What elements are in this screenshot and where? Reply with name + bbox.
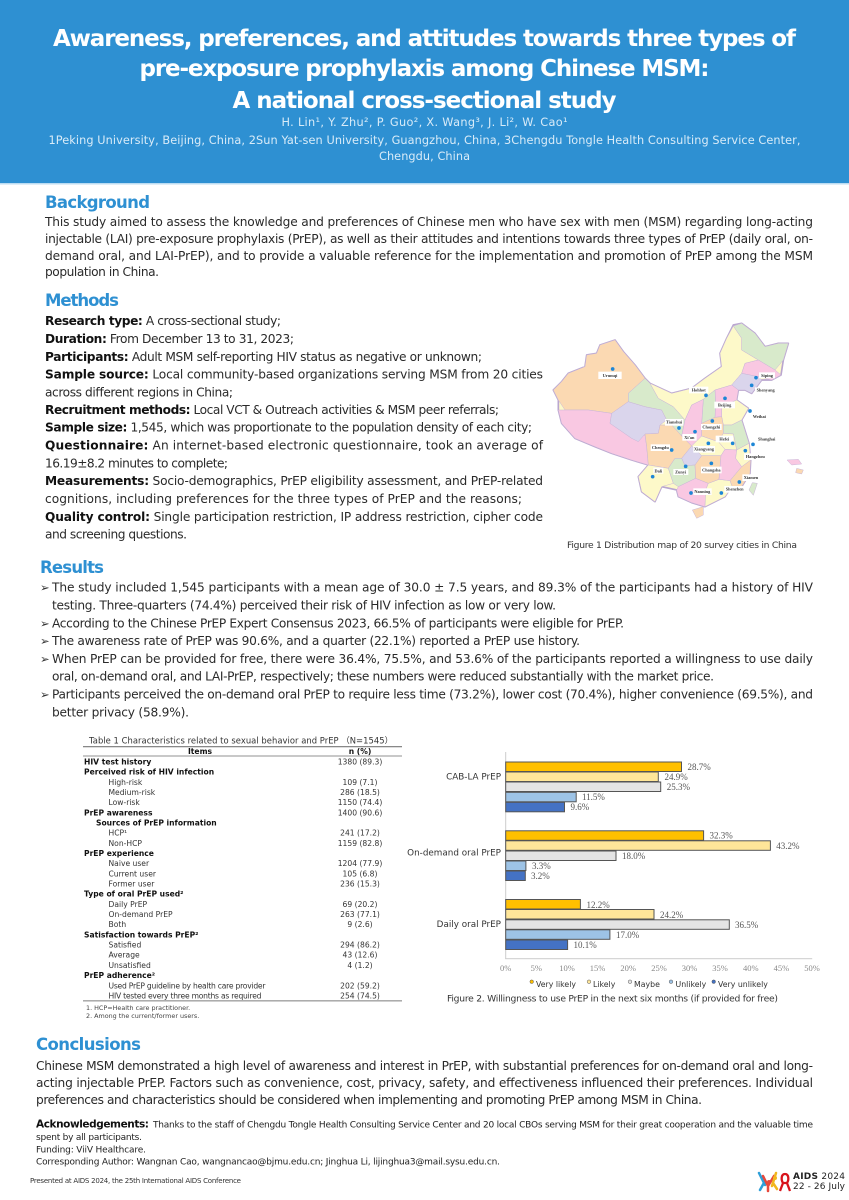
acknowledgements: Acknowledgements: xyxy=(36,1118,149,1130)
conclusions text: acting injectable PrEP. Factors such as convenience, cost, privacy, safety, and effectiveness influenced their preferences. Individual xyxy=(36,1076,813,1090)
city labels: Shenzhen xyxy=(726,487,744,492)
chart axes xyxy=(505,752,812,959)
table rows: HIV tested every three months as required xyxy=(108,991,262,1000)
table rows: 4 (1.2) xyxy=(347,961,373,970)
bars: daily oral PrEP xyxy=(506,900,729,950)
methods list: Sample source: Local community-based organizations serving MSM from 20 cities xyxy=(45,368,543,382)
table rows: Used PrEP guideline by health care provider xyxy=(108,981,266,990)
city labels: Changsha xyxy=(702,467,721,472)
results bullets: ➢ xyxy=(40,616,50,630)
acknowledgements: Thanks to the staff of Chengdu Tongle Health Consulting Service Center and 20 local CBOs serving MSM for their great cooperation and the valuable time xyxy=(152,1120,813,1130)
background text: This study aimed to assess the knowledge and preferences of Chinese men who have sex with men (MSM) regarding long-acting xyxy=(44,215,813,229)
table caption: Table 1 Characteristics related to sexual behavior and PrEP （N=1545） xyxy=(88,736,393,746)
table rows: 1380 (89.3) xyxy=(338,758,382,766)
category labels: CAB-LA PrEP xyxy=(446,773,501,783)
figure 2: bar chart xyxy=(407,752,820,1004)
table rows: Non-HCP xyxy=(108,839,142,848)
city labels: Xi'an xyxy=(684,435,695,440)
bars: CAB-LA PrEP xyxy=(506,762,682,812)
table rows: HCP¹ xyxy=(108,829,127,838)
table rows: Unsatisfied xyxy=(108,961,151,970)
values: daily oral PrEP: 24.2% xyxy=(660,910,684,920)
results bullets: ➢ xyxy=(40,634,50,648)
background text: injectable (LAI) pre-exposure prophylaxis (PrEP), as well as their attitudes and intentions towards three types of PrEP (daily oral, on- xyxy=(45,232,813,246)
legend xyxy=(530,980,768,989)
x axis ticks: 40% xyxy=(743,963,759,973)
authors and affiliations: 1Peking University, Beijing, China, 2Sun Yat-sen University, Guangzhou, China, 3Chengdu Tongle Health Consulting Service Center, xyxy=(48,134,800,147)
table rows: PrEP awareness xyxy=(84,808,153,817)
table header: Items xyxy=(188,747,212,756)
table rows: High-risk xyxy=(108,778,143,787)
category labels xyxy=(407,773,501,930)
acknowledgements: spent by all participants. xyxy=(36,1133,142,1143)
x axis ticks: 35% xyxy=(712,963,728,973)
values: daily oral PrEP: 36.5% xyxy=(735,920,759,930)
heading: methods: Methods xyxy=(45,291,119,310)
city labels: Zunyi xyxy=(675,470,687,475)
table rows: 109 (7.1) xyxy=(343,778,377,787)
table rows: Daily PrEP xyxy=(108,900,147,909)
legend: Unlikely xyxy=(676,980,707,989)
city labels: Hangzhou xyxy=(746,454,765,459)
table rows: PrEP adherence² xyxy=(84,971,155,980)
acknowledgements: Funding: ViiV Healthcare. xyxy=(36,1146,146,1156)
icon: red ribbon xyxy=(780,1174,790,1191)
heading: background: Background xyxy=(45,193,150,212)
results bullets: testing. Three-quarters (74.4%) perceived their risk of HIV infection as low or very low. xyxy=(52,598,556,612)
x axis ticks: 15% xyxy=(590,963,605,973)
table rows: 241 (17.2) xyxy=(340,829,380,838)
city labels: Nanning xyxy=(694,489,711,494)
table rows: 1159 (82.8) xyxy=(338,839,382,848)
category labels: Daily oral PrEP xyxy=(437,920,501,930)
table rows: Perceived risk of HIV infection xyxy=(84,768,214,777)
table rows: 202 (59.2) xyxy=(340,981,380,990)
acknowledgements: Corresponding Author: Wangnan Cao, wangnancao@bjmu.edu.cn; Jinghua Li, lijinghua3@mail.sysu.edu.cn. xyxy=(36,1158,500,1168)
table header xyxy=(83,746,402,756)
results bullets: When PrEP can be provided for free, there were 36.4%, 75.5%, and 53.6% of the participants reported a willingness to use daily xyxy=(52,652,813,666)
city labels: Weihai xyxy=(753,414,767,419)
background text: population in China. xyxy=(45,265,159,279)
section: background xyxy=(44,193,813,279)
china map xyxy=(553,323,803,518)
results bullets: According to the Chinese PrEP Expert Consensus 2023, 66.5% of participants were eligible for PrEP. xyxy=(52,616,624,630)
methods list xyxy=(45,314,544,542)
table rows: Naive user xyxy=(108,859,150,868)
section: conclusions xyxy=(36,1035,813,1107)
values: daily oral PrEP: 10.1% xyxy=(574,940,597,950)
values: on-demand oral PrEP xyxy=(531,830,800,881)
values: on-demand oral PrEP: 43.2% xyxy=(776,841,800,851)
legend: Very likely xyxy=(536,980,576,989)
table rows: Sources of PrEP information xyxy=(96,818,217,828)
footer note: Presented at AIDS 2024, the 25th International AIDS Conference xyxy=(30,1177,241,1185)
results bullets: The study included 1,545 participants with a mean age of 30.0 ± 7.5 years, and 89.3% of the participants had a history of HIV xyxy=(51,581,814,595)
table footnotes: 2. Among the current/former users. xyxy=(86,1012,199,1020)
authors and affiliations: Chengdu, China xyxy=(379,150,470,163)
table rows: 9 (2.6) xyxy=(347,920,373,929)
city labels: Shanghai xyxy=(758,437,776,442)
methods list: Quality control: Single participation restriction, IP address restriction, cipher code xyxy=(45,510,543,524)
icon: figures xyxy=(759,1173,777,1191)
table footnotes: 1. HCP=Health care practitioner. xyxy=(86,1004,190,1012)
city labels: Urumqi xyxy=(603,373,618,378)
conclusions text: preferences and characteristics should be considered when implementing and promoting PrEP among MSM in China. xyxy=(36,1093,702,1107)
city labels: Xiamen xyxy=(744,475,759,480)
values: daily oral PrEP: 12.2% xyxy=(586,900,610,910)
table rows: 69 (20.2) xyxy=(343,900,377,909)
x axis ticks: 5% xyxy=(531,963,542,973)
city markers xyxy=(611,367,758,495)
x axis ticks: 50% xyxy=(804,963,820,973)
values: CAB-LA PrEP: 25.3% xyxy=(667,782,691,792)
table rows: Type of oral PrEP used² xyxy=(84,890,184,899)
x axis ticks: 10% xyxy=(559,963,575,973)
results bullets: Participants perceived the on-demand oral PrEP to require less time (73.2%), lower cost (70.4%), higher convenience (69.5%), and xyxy=(52,688,813,702)
x axis ticks: 0% xyxy=(500,963,511,973)
table rows: 294 (86.2) xyxy=(340,941,380,950)
table 1: characteristics xyxy=(83,736,402,1020)
values: daily oral PrEP xyxy=(574,900,759,950)
authors and affiliations: H. Lin¹, Y. Zhu², P. Guo², X. Wang³, J. Li², W. Cao¹ xyxy=(282,116,568,129)
table rows xyxy=(84,758,382,1000)
table rows: 263 (77.1) xyxy=(340,910,380,919)
methods list: and screening questions. xyxy=(45,528,187,542)
legend: Very unlikely xyxy=(718,980,768,989)
figure 2 caption: Figure 2. Willingness to use PrEP in the next six months (if provided for free) xyxy=(447,994,778,1004)
methods list: Recruitment methods: Local VCT & Outreach activities & MSM peer referrals; xyxy=(45,403,499,417)
results bullets xyxy=(40,581,814,719)
methods list: across different regions in China; xyxy=(45,386,233,400)
background text xyxy=(44,215,813,279)
values: CAB-LA PrEP: 9.6% xyxy=(570,802,590,812)
section: methods xyxy=(45,291,544,542)
heading: conclusions: Conclusions xyxy=(36,1035,141,1054)
city labels: Shenyang xyxy=(757,388,776,393)
values: on-demand oral PrEP: 3.2% xyxy=(531,871,550,881)
table rows: 236 (15.3) xyxy=(340,880,380,888)
heading: results: Results xyxy=(40,558,104,577)
title: pre-exposure prophylaxis among Chinese MSM: xyxy=(140,56,710,82)
values: CAB-LA PrEP: 24.9% xyxy=(664,772,688,782)
city labels: Beijing xyxy=(718,402,732,407)
methods list: Duration: From December 13 to 31, 2023; xyxy=(45,332,294,346)
methods list: cognitions, including preferences for the three types of PrEP and the reasons; xyxy=(45,492,522,506)
table rows: Satisfied xyxy=(108,941,141,950)
table rows: 1400 (90.6) xyxy=(338,808,382,817)
table rows: Current user xyxy=(108,869,157,878)
authors and affiliations xyxy=(48,116,800,163)
table rows: PrEP experience xyxy=(84,849,154,858)
bars: on-demand oral PrEP xyxy=(506,831,770,880)
logo text: 22 - 26 July xyxy=(793,1182,846,1192)
table rows: Low-risk xyxy=(108,798,140,807)
results bullets: ➢ xyxy=(40,652,50,666)
city labels: Tianshui xyxy=(666,420,683,425)
table rows: Medium-risk xyxy=(108,788,156,797)
city labels: Siping xyxy=(761,373,774,378)
city labels: Hefei xyxy=(719,436,730,441)
values: on-demand oral PrEP: 3.3% xyxy=(532,861,551,871)
table header: n (%) xyxy=(349,747,371,756)
values: on-demand oral PrEP: 18.0% xyxy=(622,851,646,861)
methods list: Questionnaire: An internet-based electronic questionnaire, took an average of xyxy=(45,439,544,453)
city labels: Xiangyang xyxy=(694,447,715,452)
title xyxy=(53,26,797,114)
methods list: Sample size: 1,545, which was proportionate to the population density of each city; xyxy=(45,421,532,435)
AIDS 2024 logo xyxy=(759,1172,846,1192)
acknowledgements xyxy=(36,1118,813,1168)
table rows: Satisfaction towards PrEP² xyxy=(84,930,198,939)
city labels: Hohhot xyxy=(692,388,706,393)
background text: demand oral, and LAI-PrEP), and to provide a valuable reference for the implementation and promotion of PrEP among the MSM xyxy=(45,249,813,263)
title: Awareness, preferences, and attitudes towards three types of xyxy=(53,26,797,52)
header banner xyxy=(0,0,849,184)
table rows: On-demand PrEP xyxy=(108,910,173,919)
values: CAB-LA PrEP: 28.7% xyxy=(688,762,711,772)
legend: Likely xyxy=(593,980,616,989)
x axis ticks: 25% xyxy=(651,963,667,973)
x axis ticks: 45% xyxy=(774,963,789,973)
methods list: Measurements: Socio-demographics, PrEP eligibility assessment, and PrEP-related xyxy=(45,474,543,488)
conclusions text xyxy=(36,1059,813,1107)
figure 1 caption: Figure 1 Distribution map of 20 survey cities in China xyxy=(567,540,797,551)
table rows: 254 (74.5) xyxy=(340,991,380,1000)
table rows: Average xyxy=(108,951,140,960)
table rows: 105 (6.8) xyxy=(343,869,377,878)
x axis ticks: 30% xyxy=(682,963,697,973)
values: daily oral PrEP: 17.0% xyxy=(616,930,640,940)
city labels: Chongzhi xyxy=(702,424,721,429)
table rows: 43 (12.6) xyxy=(343,951,377,960)
table footnotes xyxy=(86,1004,199,1020)
figure 1: map of survey cities xyxy=(553,323,803,551)
table rows: Former user xyxy=(108,880,155,888)
title: A national cross-sectional study xyxy=(232,88,616,114)
results bullets: ➢ xyxy=(40,581,50,595)
city labels: Chengdu xyxy=(652,445,669,450)
methods list: Participants: Adult MSM self-reporting HIV status as negative or unknown; xyxy=(45,350,482,364)
methods list: Research type: A cross-sectional study; xyxy=(45,314,281,328)
results bullets: oral, on-demand oral, and LAI-PrEP, respectively; these numbers were reduced substantially with the market price. xyxy=(52,670,714,684)
values: CAB-LA PrEP xyxy=(570,762,711,812)
x axis ticks xyxy=(500,963,820,973)
results bullets: better privacy (58.9%). xyxy=(52,705,189,719)
section: results xyxy=(40,558,814,719)
city labels: Dali xyxy=(654,468,663,473)
values: on-demand oral PrEP: 32.3% xyxy=(710,830,733,840)
category labels: On-demand oral PrEP xyxy=(407,849,501,859)
city labels xyxy=(598,372,777,495)
conclusions text: Chinese MSM demonstrated a high level of awareness and interest in PrEP, with substantial preferences for on-demand oral and long- xyxy=(36,1059,813,1073)
table rows: Both xyxy=(108,920,126,929)
table rows: 1150 (74.4) xyxy=(338,798,382,807)
table rows: 286 (18.5) xyxy=(340,788,380,797)
results bullets: The awareness rate of PrEP was 90.6%, and a quarter (22.1%) reported a PrEP use history. xyxy=(51,634,580,648)
legend: Maybe xyxy=(634,980,660,989)
values: CAB-LA PrEP: 11.5% xyxy=(582,792,605,802)
results bullets: ➢ xyxy=(40,688,50,702)
methods list: 16.19±8.2 minutes to complete; xyxy=(45,456,228,470)
table rows: HIV test history xyxy=(84,758,151,766)
logo text: AIDS 2024 xyxy=(793,1172,845,1182)
table rows: 1204 (77.9) xyxy=(338,859,382,868)
logo text xyxy=(793,1172,846,1192)
x axis ticks: 20% xyxy=(620,963,636,973)
